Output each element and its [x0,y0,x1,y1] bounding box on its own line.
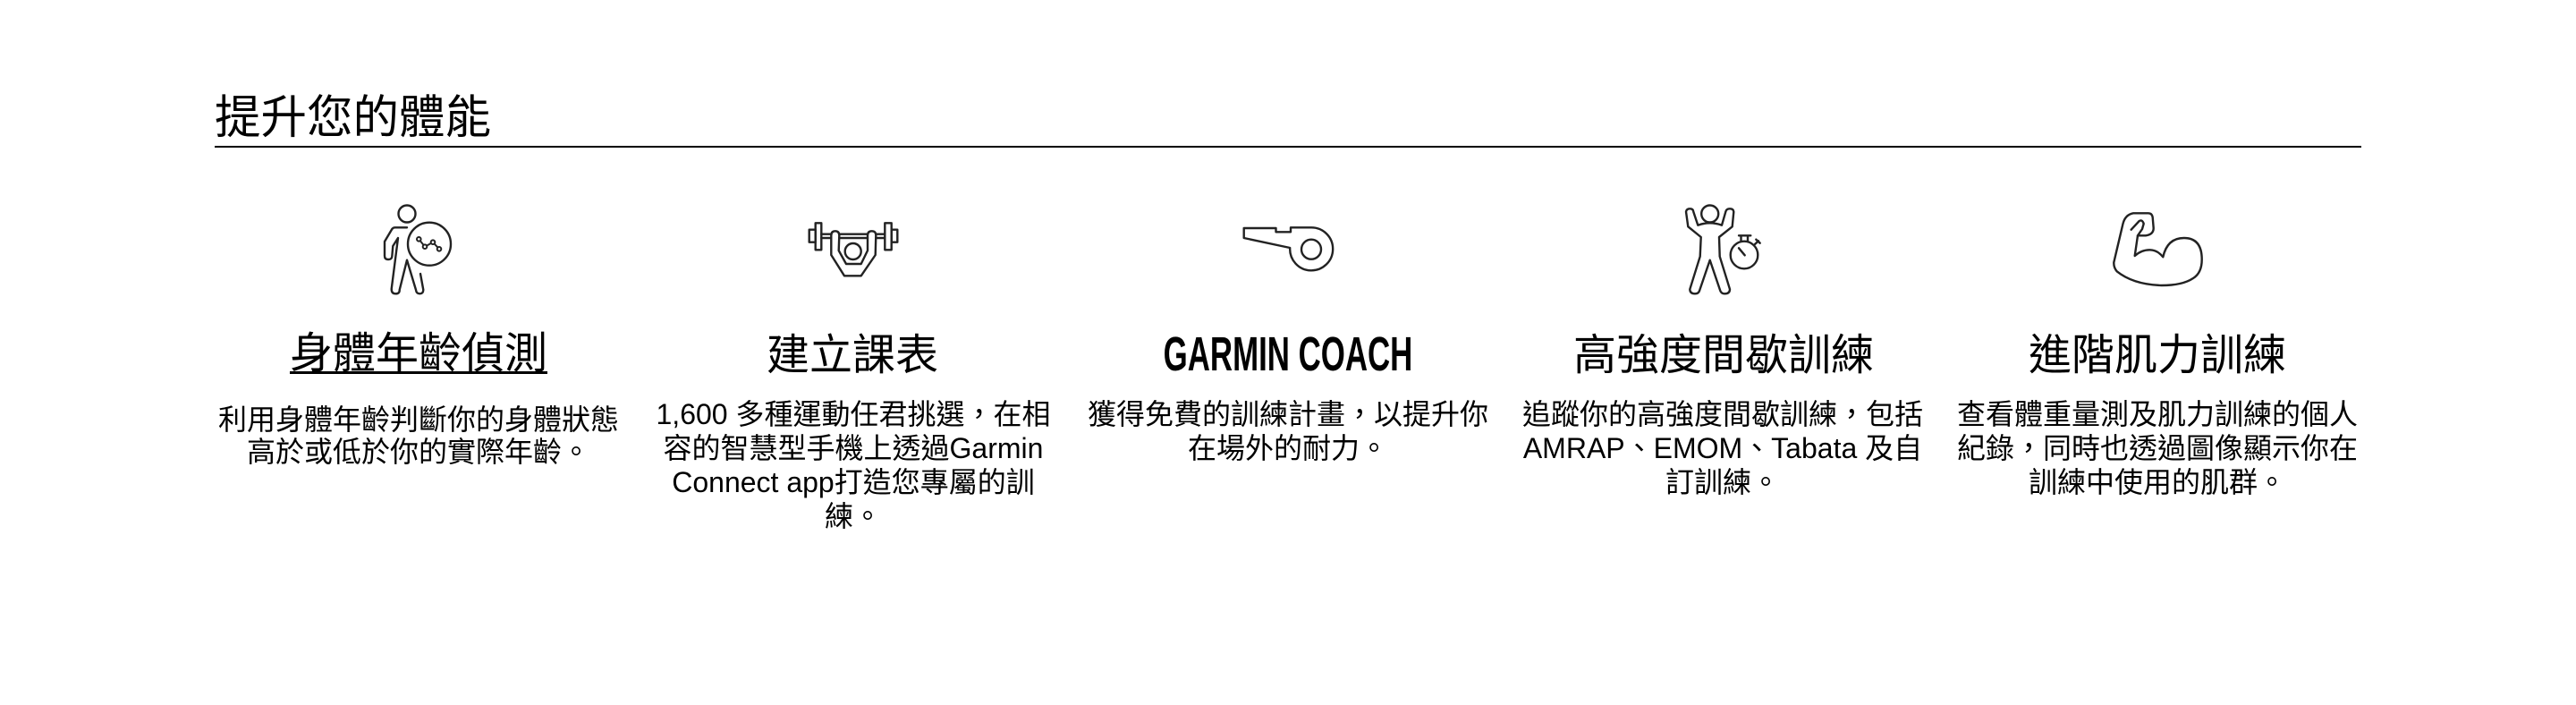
text: Garmin Coach [1088,398,1488,464]
heading: HIIT: 高強度間歇訓練 [1573,332,1874,379]
text: strength training: 訓練中使用的肌群。 [2029,466,2286,498]
icon: whistle [1244,227,1333,270]
heading: Garmin Coach: GARMIN COACH [1163,327,1412,381]
icon: person with stopwatch [1686,206,1760,293]
text: strength training: 紀錄，同時也透過圖像顯示你在 [1957,432,2358,464]
icon: weightlifter [809,223,897,276]
text: HIIT [1522,398,1923,498]
text: body age: 利用身體年齡判斷你的身體狀態 [218,403,619,436]
icon: flexed arm [2114,213,2202,285]
text: body age: 高於或低於你的實際年齡。 [247,436,590,468]
text: HIIT: AMRAP、EMOM、Tabata 及自 [1523,432,1922,464]
text: build workouts: 容的智慧型手機上透過Garmin [664,432,1043,464]
text: build workouts [657,398,1050,532]
text: strength training [1957,398,2358,498]
text: body age [218,403,619,468]
text: HIIT: 訂訓練。 [1665,466,1780,498]
icon: person with body age chart [385,206,451,293]
text: Garmin Coach: 在場外的耐力。 [1188,432,1388,464]
text: strength training: 查看體重量測及肌力訓練的個人 [1957,398,2358,430]
text: Garmin Coach: 獲得免費的訓練計畫，以提升你 [1088,398,1488,430]
heading: strength training: 進階肌力訓練 [2029,332,2286,379]
title: 提升您的體能 [215,91,491,143]
text: HIIT: 追蹤你的高強度間歇訓練，包括 [1522,398,1923,430]
heading rule [215,146,2361,148]
heading: body age: 身體年齡偵測 [290,330,547,378]
text: build workouts: 1,600 多種運動任君挑選，在相 [657,398,1050,430]
text: build workouts: 練。 [825,500,882,532]
heading: build workouts: 建立課表 [767,332,938,379]
text: build workouts: Connect app打造您專屬的訓 [672,466,1035,498]
